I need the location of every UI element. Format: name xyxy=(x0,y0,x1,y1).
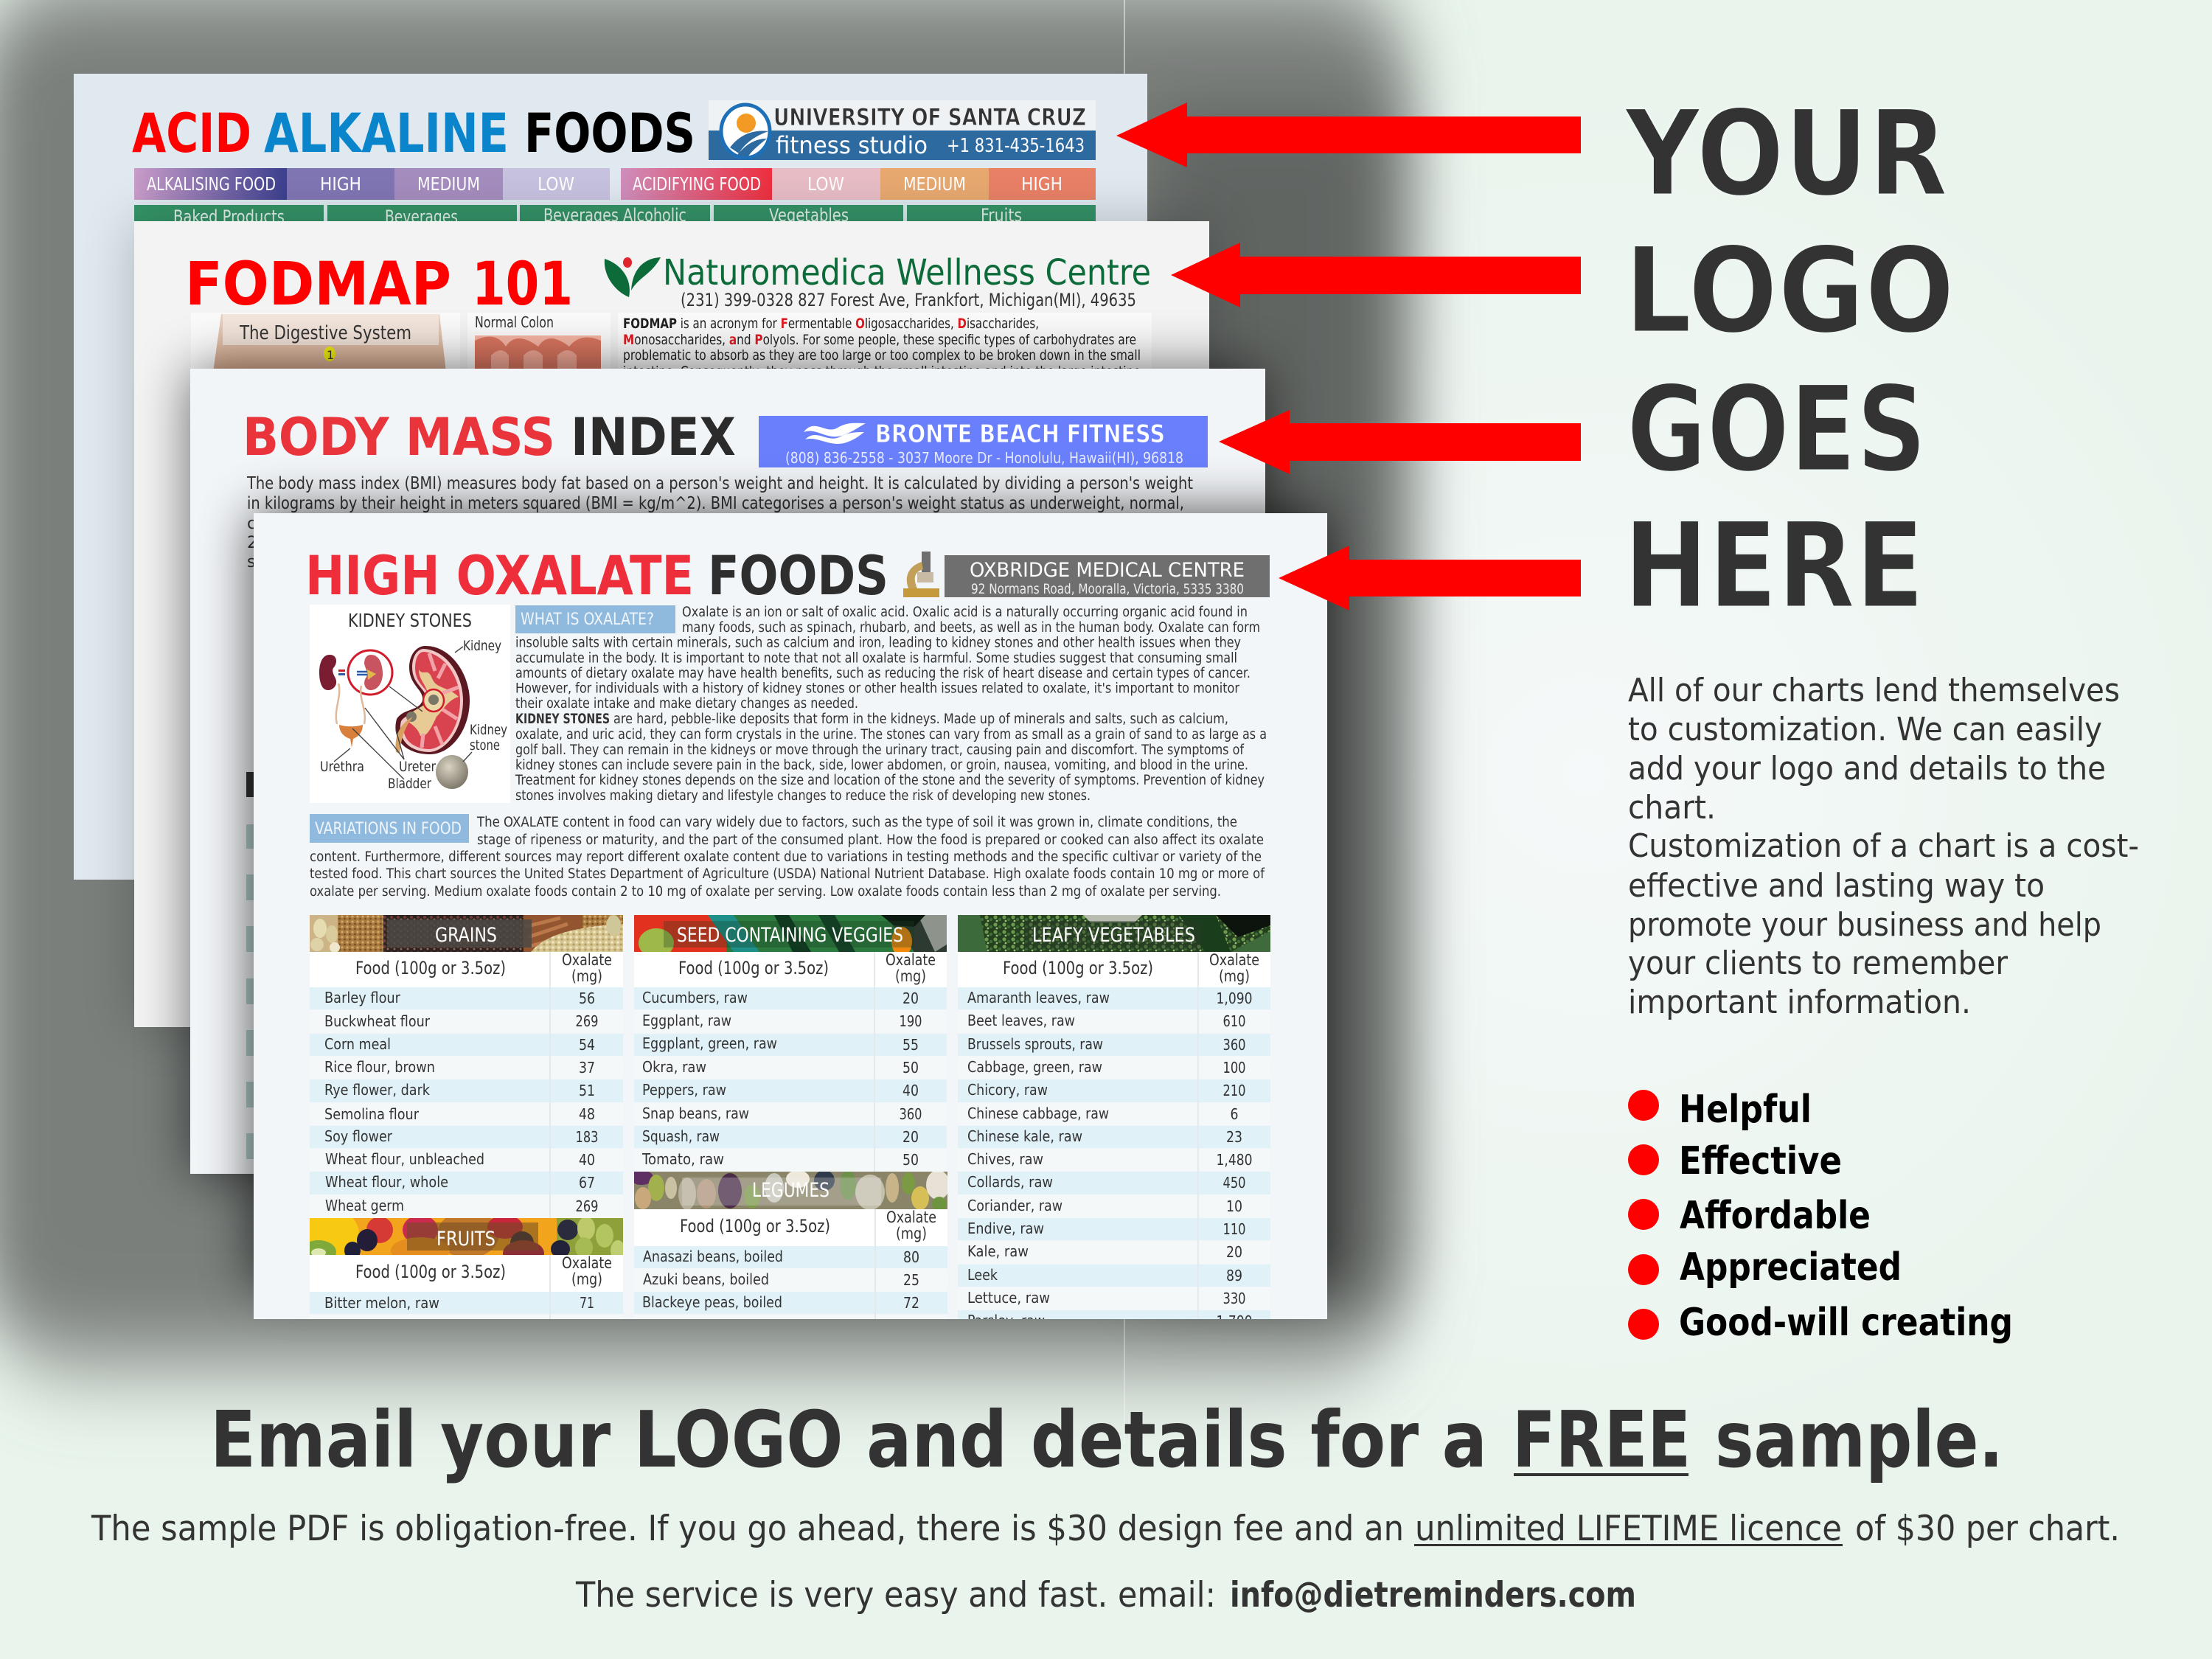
rows: 23 xyxy=(1226,1128,1242,1146)
anatomy labels: Kidney xyxy=(463,638,501,654)
column header: (mg) xyxy=(895,967,926,985)
rows: 71 xyxy=(580,1294,594,1312)
rows: 190 xyxy=(900,1012,922,1030)
rows: Semolina flour xyxy=(324,1105,420,1123)
text: variations explanation: The OXALATE content in food can vary widely due to factors, such as the type of soil it was grown in, climate conditions, the xyxy=(476,815,1237,830)
column header: Oxalate xyxy=(886,951,936,969)
arrow 3 xyxy=(1219,410,1581,474)
text: oxalate and kidney stones explanation: many foods, such as spinach, rhubarb, and beets, as well as in the human body. Oxalate can form xyxy=(682,620,1260,636)
text: variations explanation: stage of ripeness or maturity, and the part of the consumed plant. How the food is prepared or cooked can also affect its oxalate xyxy=(477,832,1264,848)
anatomy labels: Ureter xyxy=(399,759,436,775)
rows: 10 xyxy=(1226,1197,1242,1215)
rows: 40 xyxy=(902,1082,919,1099)
table: grains xyxy=(310,915,623,1218)
text: variations explanation: tested food. This chart sources the United States Department of Agriculture (USDA) National Nutrient Database. High oxalate foods contain 10 mg or more of xyxy=(310,866,1265,882)
rows xyxy=(310,1255,623,1321)
title: body mass index: BODY MASS xyxy=(243,407,555,467)
rows: 25 xyxy=(903,1271,919,1289)
column header: Food (100g or 3.5oz) xyxy=(355,1262,506,1282)
panel: digestive system: 1 xyxy=(327,348,334,362)
rows: 55 xyxy=(902,1036,919,1054)
logo: oxbridge medical centre: OXBRIDGE MEDICAL CENTRE xyxy=(970,559,1245,582)
rows: Rye flower, dark xyxy=(324,1081,430,1099)
call to action headline: Email your LOGO and details for a xyxy=(210,1395,1487,1485)
rows: Peppers, raw xyxy=(642,1081,726,1099)
headline: your logo goes here: HERE xyxy=(1624,497,1924,635)
table: seed containing veggies xyxy=(634,915,947,1172)
bmi description text xyxy=(246,474,1193,571)
column header: Oxalate xyxy=(1209,951,1259,969)
rows: Tomato, raw xyxy=(641,1150,724,1168)
rows: 51 xyxy=(579,1082,595,1099)
column header xyxy=(634,951,947,987)
chart card 4: high oxalate foods xyxy=(254,513,1327,1330)
text: customization description: Customization of a chart is a cost- xyxy=(1628,827,2139,865)
panel: normal colon xyxy=(467,313,611,372)
panel: fodmap description: problematic to absorb as they are too large or too complex to be broken down in the small xyxy=(623,347,1141,364)
rows: 1,090 xyxy=(1217,990,1252,1007)
table: legumes xyxy=(630,1170,950,1321)
rows: Blackeye peas, boiled xyxy=(642,1293,782,1311)
panel: fodmap description: FODMAP is an acronym for Fermentable Oligosaccharides, Disaccharides, xyxy=(623,316,1039,332)
text: customization description: chart. xyxy=(1628,789,1716,827)
rows: Parsley, raw xyxy=(967,1312,1045,1329)
rows xyxy=(634,1209,947,1321)
rows: Soy flower xyxy=(324,1127,393,1145)
category tabs: Beverages xyxy=(385,206,458,227)
header image: seed veggies: SEED CONTAINING VEGGIES xyxy=(677,924,903,947)
text: customization description: promote your business and help xyxy=(1628,906,2101,944)
logo: bronte beach fitness: (808) 836-2558 - 3037 Moore Dr - Honolulu, Hawaii(HI), 96818 xyxy=(785,449,1183,467)
benefits list: Good-will creating xyxy=(1679,1301,2013,1345)
rows: 54 xyxy=(579,1036,595,1054)
rows xyxy=(634,952,947,1172)
icon: large kidney cross-section xyxy=(395,646,470,754)
panel: kidney stones illustration: KIDNEY STONES xyxy=(348,610,472,631)
logo: bronte beach fitness: BRONTE BEACH FITNESS xyxy=(875,420,1165,449)
rows: 50 xyxy=(902,1059,919,1077)
column header: Food (100g or 3.5oz) xyxy=(355,958,506,978)
logo: oxbridge medical centre xyxy=(945,555,1270,597)
title: fodmap 101: FODMAP xyxy=(185,250,451,319)
header image: leafy vegetables xyxy=(958,915,1270,952)
arrow 2 xyxy=(1171,243,1581,307)
rows: 67 xyxy=(579,1174,595,1192)
anatomy labels: Kidney xyxy=(470,722,507,738)
rows: Endive, raw xyxy=(967,1220,1044,1237)
text: oxalate and kidney stones explanation: oxalate, and uric acid, they can form crystals in the urine. The stones can vary from as small as a grain of sand to as large as a xyxy=(515,727,1267,742)
header image: legumes: LEGUMES xyxy=(752,1179,830,1202)
legend bar: alkalising and acidifying xyxy=(134,168,1096,200)
header image: fruits xyxy=(310,1218,623,1255)
header image: legumes xyxy=(630,1170,950,1211)
soft grey backdrop shadow xyxy=(0,0,1413,1364)
rows: 360 xyxy=(900,1105,922,1123)
text: oxalate and kidney stones explanation: are hard, pebble-like deposits that form in the kidneys. Made up of minerals and salts, such as calcium, xyxy=(613,712,1228,727)
rows: Wheat germ xyxy=(325,1197,404,1214)
bmi description text: The body mass index (BMI) measures body fat based on a person's weight and height. It is calculated by dividing a person's weight xyxy=(246,474,1193,493)
text: customization description: to customization. We can easily xyxy=(1628,711,2102,748)
rows: 20 xyxy=(902,990,919,1007)
text: customization description xyxy=(1628,672,2139,1021)
table: fruits xyxy=(310,1218,623,1319)
column header: Food (100g or 3.5oz) xyxy=(680,1216,830,1237)
legend bar: alkalising and acidifying: MEDIUM xyxy=(417,173,480,195)
title: high oxalate foods: FOODS xyxy=(708,545,888,608)
panel: digestive system xyxy=(191,313,460,372)
anatomy labels: Urethra xyxy=(320,759,364,775)
title: acid alkaline foods: FOODS xyxy=(524,102,695,165)
text: customization description: All of our charts lend themselves xyxy=(1628,672,2120,709)
panel: normal colon: Normal Colon xyxy=(475,313,554,331)
header image: seed veggies xyxy=(634,915,947,958)
rows: 20 xyxy=(1226,1243,1242,1261)
title: body mass index xyxy=(243,407,736,467)
anatomy labels: stone xyxy=(470,737,500,754)
panel: fodmap description: Monosaccharides, and Polyols. For some people, these specific types of carbohydrates are xyxy=(623,332,1136,348)
benefits list: Appreciated xyxy=(1680,1245,1902,1290)
icon: microscope xyxy=(903,552,939,597)
category tabs: Beverages Alcoholic xyxy=(543,205,686,226)
table edge visible behind card 4 xyxy=(246,772,255,1159)
rows: Chinese kale, raw xyxy=(967,1127,1082,1145)
rows: Squash, raw xyxy=(642,1127,720,1145)
panel: digestive system: The Digestive System xyxy=(239,322,411,344)
legend bar: alkalising and acidifying: LOW xyxy=(807,173,844,195)
column header xyxy=(310,951,623,987)
headline: your logo goes here: LOGO xyxy=(1624,222,1955,360)
heading: variations in food xyxy=(310,814,469,843)
text: oxalate and kidney stones explanation: However, for individuals with a history of kidney stones or other health issues related to oxalate, it's important to monitor xyxy=(515,681,1239,696)
bmi description text: in kilograms by their height in meters squared (BMI = kg/m^2). BMI categorises a person's weight status as underweight, normal, xyxy=(247,494,1184,513)
title: fodmap 101: 101 xyxy=(472,250,573,319)
rows: Amaranth leaves, raw xyxy=(967,989,1110,1006)
header image: leafy vegetables: LEAFY VEGETABLES xyxy=(1032,924,1195,947)
panel: kidney stones illustration xyxy=(310,605,510,803)
chart card 1: acid alkaline foods xyxy=(74,74,1147,880)
call to action headline: FREE xyxy=(1512,1395,1691,1485)
logo: university of santa cruz xyxy=(709,100,1096,160)
title: body mass index: INDEX xyxy=(571,407,736,467)
category tabs: Baked Products xyxy=(173,206,285,227)
text: customization description: your clients to remember xyxy=(1628,945,2008,982)
rows: 1,480 xyxy=(1217,1151,1252,1169)
header image: grains: GRAINS xyxy=(435,924,497,947)
rows: 1,700 xyxy=(1217,1312,1252,1330)
bmi description text: s xyxy=(247,553,255,571)
text: variations explanation xyxy=(310,815,1265,900)
benefits list: Effective xyxy=(1679,1139,1842,1183)
text: customization description: effective and lasting way to xyxy=(1628,867,2045,905)
anatomy labels xyxy=(320,638,507,792)
text: customization description: important information. xyxy=(1628,984,1971,1021)
icon: kidney stone xyxy=(436,755,468,789)
chart card 2: fodmap 101 xyxy=(134,221,1209,1027)
rows: 56 xyxy=(579,990,595,1007)
logo: oxbridge medical centre: 92 Normans Road, Mooralla, Victoria, 5335 3380 xyxy=(971,581,1244,597)
contact line: The service is very easy and fast. email: xyxy=(575,1575,1216,1615)
text: oxalate and kidney stones explanation: their oxalate intake and make dietary changes as needed. xyxy=(515,696,858,712)
column header: Food (100g or 3.5oz) xyxy=(678,958,829,978)
text: variations explanation: content. Furthermore, different sources may report different oxalate content due to variations in testing methods and the specific cultivar or variety of the xyxy=(310,849,1262,865)
rows: Coriander, raw xyxy=(967,1197,1062,1214)
rows: 50 xyxy=(902,1151,919,1169)
column header: (mg) xyxy=(1219,967,1250,985)
legend bar: alkalising and acidifying: HIGH xyxy=(320,173,361,195)
heading: variations in food: VARIATIONS IN FOOD xyxy=(315,820,462,838)
pricing line: of $30 per chart. xyxy=(1855,1509,2120,1549)
title: high oxalate foods: HIGH OXALATE xyxy=(305,545,694,608)
logo: bronte beach fitness xyxy=(759,416,1208,467)
rows: Wheat flour, unbleached xyxy=(325,1150,484,1168)
column header: Oxalate xyxy=(562,1254,612,1272)
heading: what is oxalate xyxy=(515,605,675,633)
contact line: info@dietreminders.com xyxy=(1230,1575,1636,1615)
logo: naturomedica wellness centre: Naturomedica Wellness Centre xyxy=(663,252,1151,293)
legend bar: alkalising and acidifying: ACIDIFYING FOOD xyxy=(633,173,761,195)
rows: Eggplant, green, raw xyxy=(642,1034,777,1052)
bmi description text: c xyxy=(247,515,256,533)
logo: university of santa cruz: +1 831-435-1643 xyxy=(947,135,1085,157)
title: acid alkaline foods xyxy=(132,102,695,165)
headline: your logo goes here xyxy=(1624,85,1955,635)
rows: 89 xyxy=(1226,1267,1242,1284)
logo: university of santa cruz: UNIVERSITY OF SANTA CRUZ xyxy=(773,103,1086,131)
rows: Bitter melon, raw xyxy=(324,1294,439,1312)
icon: ureters and bladder xyxy=(336,684,365,748)
panel: fodmap description xyxy=(618,313,1152,380)
rows: 330 xyxy=(1222,1290,1246,1307)
rows: Corn meal xyxy=(324,1035,391,1053)
logo: naturomedica wellness centre: (231) 399-0328 827 Forest Ave, Frankfort, Michigan(MI), 49635 xyxy=(681,290,1136,310)
headline: your logo goes here: GOES xyxy=(1627,361,1927,498)
rows: Okra, raw xyxy=(642,1058,706,1076)
rows: Cabbage, green, raw xyxy=(967,1058,1102,1076)
arrow 4 xyxy=(1279,546,1581,611)
column header: Oxalate xyxy=(886,1208,936,1226)
rows: Anasazi beans, boiled xyxy=(643,1248,783,1265)
title: acid alkaline foods: ACID xyxy=(132,102,251,165)
rows: Chives, raw xyxy=(967,1150,1043,1168)
text: oxalate and kidney stones explanation: stones involves making dietary and lifestyle changes to reduce the risk of developing new stones. xyxy=(515,788,1091,804)
contact line xyxy=(575,1575,1636,1615)
icon: small kidney xyxy=(319,655,345,690)
column header xyxy=(634,1208,947,1246)
rows: Leek xyxy=(967,1266,998,1284)
icon: ring with kidney detail xyxy=(348,650,392,695)
text: oxalate and kidney stones explanation: KIDNEY STONES xyxy=(515,712,610,727)
logo: university of santa cruz: fitness studio xyxy=(776,131,928,159)
rows: 6 xyxy=(1230,1105,1239,1123)
legend bar: alkalising and acidifying: ALKALISING FOOD xyxy=(147,173,276,195)
column header: Oxalate xyxy=(562,951,612,969)
rows: 450 xyxy=(1222,1174,1246,1192)
benefits list xyxy=(1628,1088,2013,1345)
text: oxalate and kidney stones explanation: amounts of dietary oxalate may have health benefits, such as reducing the risk of heart disease and certain types of cancer. xyxy=(515,666,1251,681)
column header: (mg) xyxy=(571,1270,602,1288)
pricing line: The sample PDF is obligation-free. If you go ahead, there is $30 design fee and an xyxy=(91,1509,1404,1549)
rows: Lettuce, raw xyxy=(967,1289,1050,1307)
headline: your logo goes here: YOUR xyxy=(1624,85,1948,223)
rows: 80 xyxy=(903,1248,919,1266)
rows: 210 xyxy=(1222,1082,1246,1099)
benefits list: Affordable xyxy=(1680,1194,1871,1238)
heading: what is oxalate: WHAT IS OXALATE? xyxy=(521,611,654,629)
text: oxalate and kidney stones explanation: golf ball. They can remain in the kidneys or move through the urinary tract, causing pain and discomfort. The symptoms of xyxy=(515,742,1244,758)
rows: 100 xyxy=(1222,1059,1246,1077)
pricing line: unlimited LIFETIME licence xyxy=(1415,1509,1842,1549)
category tabs: Vegetables xyxy=(769,205,849,226)
category tabs xyxy=(134,205,1096,227)
rows: Wheat flour, whole xyxy=(325,1173,448,1191)
text: oxalate and kidney stones explanation: Oxalate is an ion or salt of oxalic acid. Oxalic acid is a naturally occurring organic acid found in xyxy=(682,605,1248,620)
text: oxalate and kidney stones explanation: kidney stones can include severe pain in the back, side, lower abdomen, or groin, nausea, vomiting, and blood in the urine. xyxy=(515,758,1248,773)
arrow 1 xyxy=(1116,102,1581,167)
anatomy leader lines xyxy=(334,647,472,779)
rows xyxy=(958,952,1270,1330)
header image: fruits: FRUITS xyxy=(437,1228,495,1251)
rows: Azuki beans, boiled xyxy=(643,1270,769,1288)
text: oxalate and kidney stones explanation xyxy=(515,605,1267,804)
rows: Brussels sprouts, raw xyxy=(967,1035,1103,1053)
rows: 269 xyxy=(575,1197,599,1215)
anatomy labels: Bladder xyxy=(388,776,431,792)
rows: Chinese cabbage, raw xyxy=(967,1105,1109,1122)
category tabs: Fruits xyxy=(981,205,1022,226)
column header: Food (100g or 3.5oz) xyxy=(1003,958,1153,978)
rows: Beet leaves, raw xyxy=(967,1012,1075,1029)
panel: fodmap description: intestine. Consequently, they pass through the small intestine and into the large intestine xyxy=(623,364,1141,380)
rows: Barley flour xyxy=(324,989,401,1006)
chart card 3: body mass index xyxy=(190,369,1265,1174)
legend bar: alkalising and acidifying: HIGH xyxy=(1021,173,1062,195)
rows: Buckwheat flour xyxy=(324,1012,431,1030)
rows: 360 xyxy=(1222,1036,1246,1054)
title: acid alkaline foods: ALKALINE xyxy=(264,102,509,165)
rows: 72 xyxy=(903,1294,919,1312)
rows: Collards, raw xyxy=(967,1173,1053,1191)
rows xyxy=(310,952,623,1218)
rows: 37 xyxy=(579,1059,595,1077)
column header xyxy=(958,951,1270,987)
bmi description text: 2 xyxy=(247,534,257,552)
benefits list: Helpful xyxy=(1679,1088,1812,1132)
header image: grains xyxy=(310,915,623,953)
text: oxalate and kidney stones explanation: accumulate in the body. It is important to note that not all oxalate is harmful. Some studies suggest that consuming small xyxy=(515,650,1237,667)
rows: 183 xyxy=(575,1128,599,1146)
rows: 48 xyxy=(579,1105,595,1123)
rows: Eggplant, raw xyxy=(642,1012,731,1029)
legend bar: alkalising and acidifying: LOW xyxy=(538,173,574,195)
rows: Snap beans, raw xyxy=(642,1105,749,1122)
text: oxalate and kidney stones explanation: insoluble salts with certain minerals, such as calcium and iron, leading to kidney stones and other health issues when they xyxy=(515,636,1241,650)
text: customization description: add your logo and details to the xyxy=(1628,750,2106,787)
column header: (mg) xyxy=(896,1225,927,1242)
rows: Kale, raw xyxy=(967,1242,1029,1260)
rows: Rice flour, brown xyxy=(324,1058,435,1076)
rows: 20 xyxy=(902,1128,919,1146)
rows: 40 xyxy=(579,1151,595,1169)
rows: 610 xyxy=(1222,1012,1246,1030)
rows: Chicory, raw xyxy=(967,1081,1048,1099)
logo: naturomedica wellness centre xyxy=(605,252,1151,310)
column header xyxy=(310,1254,623,1292)
table: leafy vegetables xyxy=(958,915,1270,1330)
rows: 269 xyxy=(575,1012,599,1030)
column header: (mg) xyxy=(571,967,602,985)
legend bar: alkalising and acidifying: MEDIUM xyxy=(903,173,966,195)
rows: 110 xyxy=(1222,1220,1246,1238)
text: variations explanation: oxalate per serving. Medium oxalate foods contain 2 to 10 mg of oxalate per serving. Low oxalate foods contain less than 2 mg of oxalate per serving. xyxy=(310,884,1221,900)
text: oxalate and kidney stones explanation: Treatment for kidney stones depends on the size and location of the stone and the severity of symptoms. Prevention of kidney xyxy=(515,773,1265,788)
call to action headline: sample. xyxy=(1715,1395,2003,1485)
rows: Cucumbers, raw xyxy=(642,989,748,1006)
